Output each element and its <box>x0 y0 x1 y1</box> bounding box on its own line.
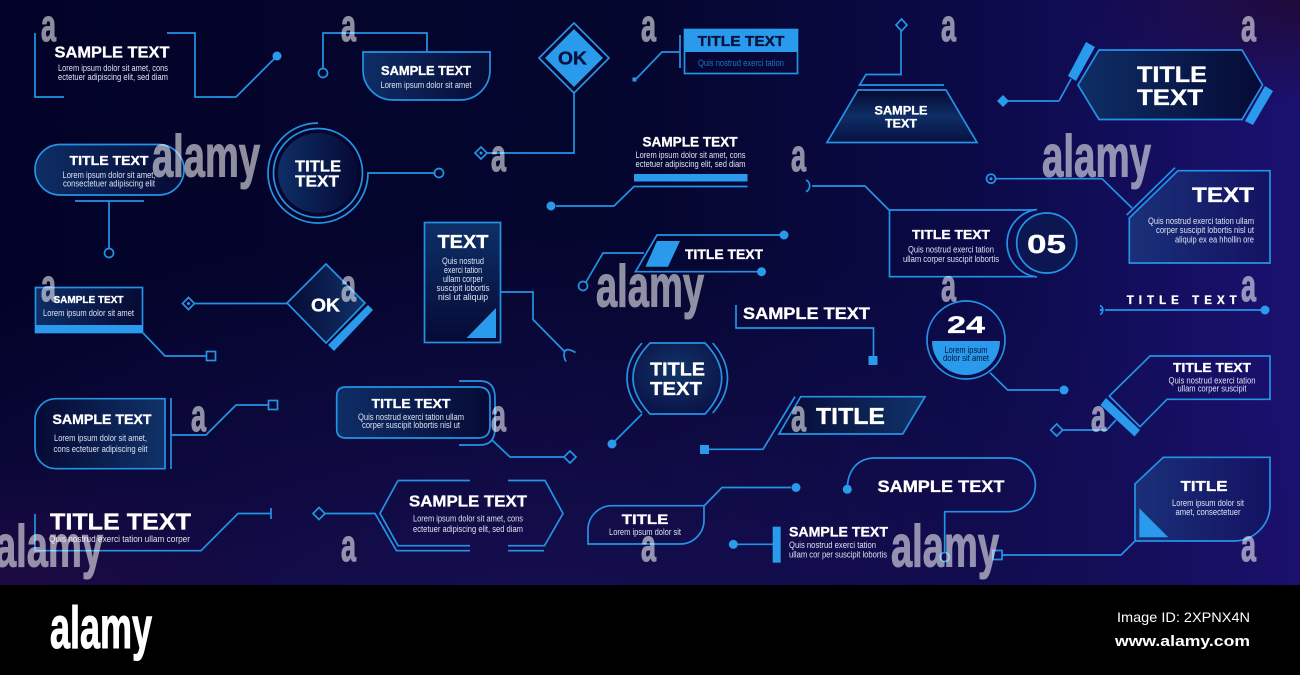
callout: side bar sample text: SAMPLE TEXT <box>789 524 889 540</box>
callout: open pill sample text: SAMPLE TEXT <box>878 478 1004 496</box>
callout: tall text box: ullam corper <box>443 274 483 284</box>
callout: trapezoid sample text <box>827 19 977 142</box>
callout: large underlined title text <box>35 508 271 551</box>
footer band: alamy <box>50 595 152 661</box>
watermarks: a <box>41 0 57 51</box>
callout: parallelogram title text <box>578 230 788 290</box>
callout: number 05 panel: ullam corper suscipit lobortis <box>903 254 999 264</box>
callout: sample text with bar: ectetuer adipiscing elit, sed diam <box>636 159 746 169</box>
callout: open pill sample text <box>843 458 1035 562</box>
watermarks: a <box>1241 260 1257 311</box>
callout: rounded octagon title text: TITLE <box>650 358 705 380</box>
callout: open hexagon sample text: ectetuer adipiscing elit, sed diam <box>413 524 523 534</box>
callout: number 05 panel <box>806 180 1077 277</box>
callout: box with bottom bar: Lorem ipsum dolor sit amet <box>43 308 134 318</box>
callout: shield title panel <box>993 457 1270 560</box>
callout: bracket sample text: Lorem ipsum dolor sit amet, cons <box>58 63 168 73</box>
watermarks: a <box>941 0 957 51</box>
callout: hexagon large title text: TITLE <box>1137 62 1207 87</box>
callout: small tab title <box>588 483 800 544</box>
callout: open hexagon sample text: SAMPLE TEXT <box>409 494 527 510</box>
callout: sample text with bar <box>546 134 748 210</box>
callout: cut corner text panel: Quis nostrud exerci tation ullam <box>1148 216 1254 226</box>
watermarks: a <box>641 520 657 571</box>
callout: trapezoid sample text: TEXT <box>885 118 917 130</box>
callout: slanted title: TITLE <box>816 403 885 429</box>
watermarks: alamy <box>1042 124 1151 190</box>
callout: shield title panel: Lorem ipsum dolor sit <box>1172 498 1244 508</box>
watermarks: a <box>1241 520 1257 571</box>
callout: large underlined title text: TITLE TEXT <box>50 508 191 534</box>
callout: parallelogram title text: TITLE TEXT <box>685 247 764 262</box>
watermarks: a <box>341 260 357 311</box>
watermarks: a <box>791 130 807 181</box>
callout: angled title text <box>1051 356 1270 436</box>
callout: circle title text: TEXT <box>295 174 340 190</box>
callout: number 24 circle: 24 <box>947 312 986 339</box>
watermarks: a <box>491 130 507 181</box>
footer band <box>0 585 1300 675</box>
callout: OK diamond filled <box>475 23 609 159</box>
callout: number 24 circle: dolor sit amet <box>943 353 989 363</box>
callout: number 05 panel: Quis nostrud exerci tation <box>908 244 994 254</box>
watermarks: alamy <box>152 124 260 190</box>
callout: pill title text: Lorem ipsum dolor sit amet, <box>62 170 156 180</box>
callout: angled title text: Quis nostrud exerci tation <box>1168 376 1256 386</box>
watermarks: a <box>1241 0 1257 51</box>
callout: angled title text: ullam corper suscipit <box>1178 384 1247 394</box>
callout: side bar sample text <box>729 524 889 563</box>
callout: slanted title <box>700 397 925 454</box>
callout: OK diamond with stripe <box>182 264 373 351</box>
callout: bracket sample text <box>35 33 282 97</box>
watermarks: a <box>191 390 207 441</box>
callout: rounded box title text: Quis nostrud exerci tation ullam <box>358 412 464 422</box>
callout: rounded box title text <box>337 381 576 463</box>
callout: bracket sample text: SAMPLE TEXT <box>54 44 170 62</box>
callout: pill title text: consectetuer adipiscing elit <box>63 178 155 188</box>
callout: spaced title line: TITLE TEXT <box>1127 295 1237 307</box>
callout: sample text with bar: SAMPLE TEXT <box>642 134 738 150</box>
callout: shield title panel: amet, consectetuer <box>1176 507 1240 517</box>
watermarks: a <box>641 0 657 51</box>
callout: trapezoid sample text: SAMPLE <box>874 106 928 118</box>
watermarks: alamy <box>596 254 704 320</box>
callout: underlined sample text: SAMPLE TEXT <box>743 305 870 323</box>
callout: cut corner text panel: TEXT <box>1192 184 1254 207</box>
callout: tall text box: nisl ut aliquip <box>438 292 488 302</box>
callout: left rounded box sample text: cons ectetuer adipiscing elit <box>54 444 148 454</box>
callout: left rounded box sample text <box>35 398 278 469</box>
callout: circle title text <box>268 123 444 223</box>
callout: side bar sample text: Quis nostrud exerci tation <box>789 540 876 550</box>
callout: box with bottom bar: SAMPLE TEXT <box>54 295 124 306</box>
callout: pill title text: TITLE TEXT <box>70 153 149 168</box>
watermarks: a <box>1091 390 1107 441</box>
callout: small tab title: Lorem ipsum dolor sit <box>609 527 681 537</box>
callout: rounded box title text: TITLE TEXT <box>372 396 451 411</box>
callout: tall text box: Quis nostrud <box>442 256 484 266</box>
callout: rounded tab sample text: Lorem ipsum dolor sit amet <box>380 80 472 90</box>
watermarks: a <box>791 390 807 441</box>
callout: rounded box title text: corper suscipit lobortis nisl ut <box>362 420 460 430</box>
callout: left rounded box sample text: SAMPLE TEXT <box>52 411 152 427</box>
callout: angled title text: TITLE TEXT <box>1173 360 1251 375</box>
watermarks: a <box>341 0 357 51</box>
callout: side bar sample text: ullam cor per suscipit lobortis <box>789 550 887 560</box>
callout: rounded octagon title text <box>608 343 728 448</box>
callout: underlined sample text <box>736 305 878 365</box>
callout: filled header title text: Quis nostrud exerci tation <box>698 58 784 68</box>
callout: hexagon large title text: TEXT <box>1137 85 1204 110</box>
watermarks: a <box>41 260 57 311</box>
callout: cut corner text panel: corper suscipit lobortis nisl ut <box>1156 225 1254 235</box>
watermarks: a <box>341 520 357 571</box>
callout: spaced title line <box>1100 295 1270 314</box>
callout: rounded tab sample text: SAMPLE TEXT <box>381 64 471 78</box>
callout: number 05 panel: TITLE TEXT <box>912 227 990 242</box>
watermarks: a <box>491 390 507 441</box>
callout: box with bottom bar <box>35 288 216 360</box>
callout: rounded tab sample text <box>318 33 490 100</box>
callout: open hexagon sample text <box>313 480 563 551</box>
callout: tall text box: suscipit lobortis <box>436 283 490 293</box>
callout: circle title text: TITLE <box>295 158 341 176</box>
callout: small tab title: TITLE <box>622 511 668 527</box>
callout: shield title panel: TITLE <box>1180 479 1228 495</box>
callout: sample text with bar: Lorem ipsum dolor sit amet, cons <box>636 150 746 160</box>
callout: tall text box: exerci tation <box>444 265 482 275</box>
callout: pill title text <box>35 144 184 258</box>
callout: number 05 panel: 05 <box>1027 229 1066 259</box>
callout: number 24 circle: Lorem ipsum <box>944 345 988 355</box>
callout: tall text box <box>424 222 576 362</box>
callout: large underlined title text: Quis nostrud exerci tation ullam corper <box>49 534 190 544</box>
callout: bracket sample text: ectetuer adipiscing elit, sed diam <box>58 72 168 82</box>
watermarks: a <box>941 260 957 311</box>
callout: number 24 circle <box>927 301 1068 394</box>
callout: OK diamond filled: OK <box>558 48 587 68</box>
footer band: Image ID: 2XPNX4N <box>1117 609 1250 625</box>
callout: hexagon large title text <box>997 42 1273 125</box>
callout: open hexagon sample text: Lorem ipsum dolor sit amet, cons <box>413 514 523 524</box>
watermarks: alamy <box>891 514 999 580</box>
footer band: www.alamy.com <box>1114 633 1250 650</box>
watermarks: alamy <box>0 514 103 580</box>
callout: filled header title text <box>632 29 798 82</box>
callout: OK diamond with stripe: OK <box>311 296 340 316</box>
callout: cut corner text panel: aliquip ex ea hhollin ore <box>1175 234 1254 244</box>
callout: cut corner text panel <box>986 168 1270 263</box>
callout: filled header title text: TITLE TEXT <box>698 34 785 50</box>
callout: tall text box: TEXT <box>438 232 488 252</box>
callout: rounded octagon title text: TEXT <box>650 378 703 399</box>
callout: left rounded box sample text: Lorem ipsum dolor sit amet, <box>54 433 147 443</box>
